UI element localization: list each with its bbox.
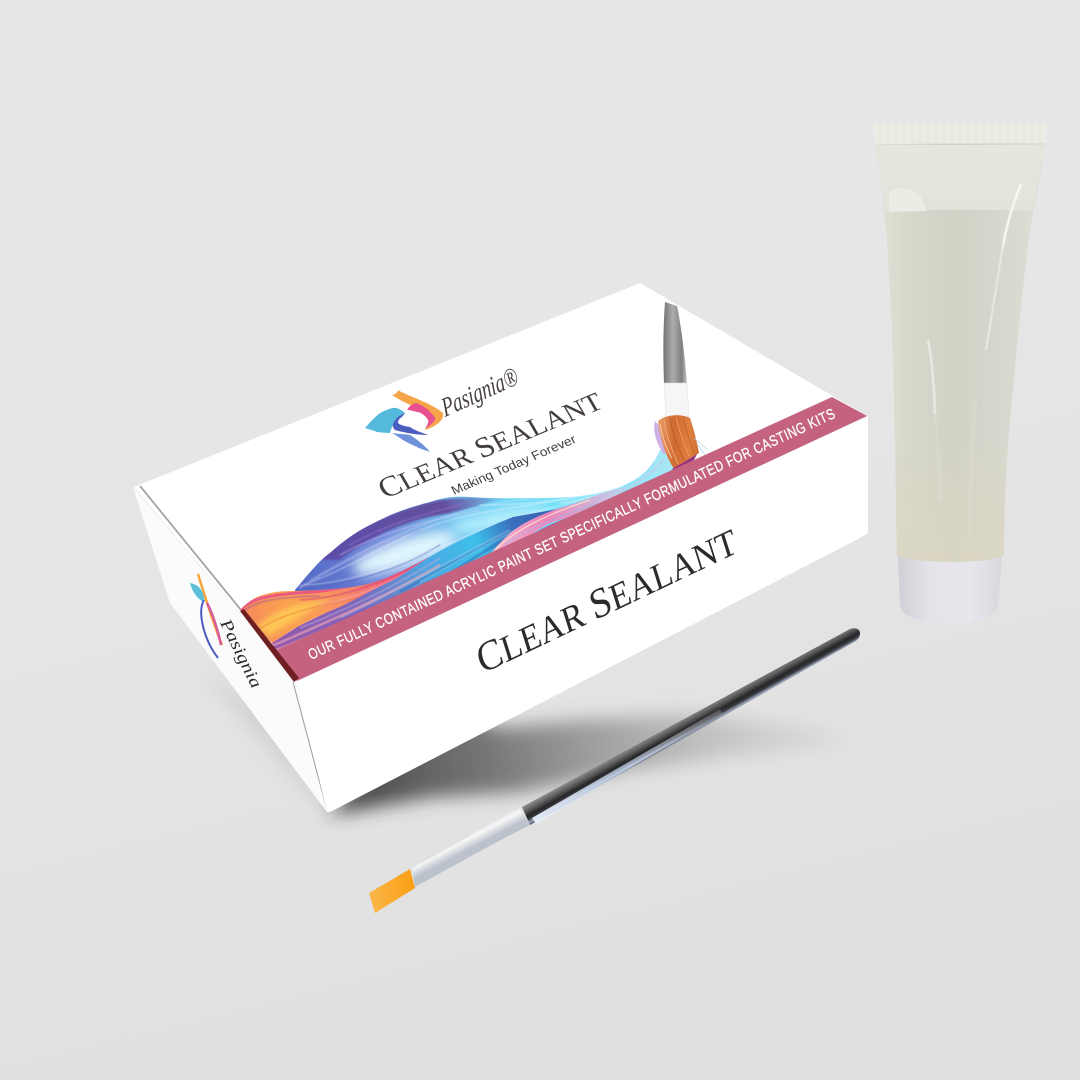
magenta below bristles [672,454,697,470]
tube upper empty area [877,145,1045,212]
brand name: Pasignia® [437,361,521,423]
tube body [876,143,1045,562]
box front title: CLEAR SEALANT [471,518,742,684]
product scene [133,124,1045,913]
painting brush [654,302,708,468]
box hinge line [140,486,241,610]
crimp [873,123,1047,144]
box left side face [133,487,330,812]
handle [522,628,860,825]
tagline: Making Today Forever [449,432,579,498]
brush bristles [654,415,708,468]
orange and pink wave [240,556,430,643]
small flat brush [369,628,860,913]
side logo [190,574,266,692]
side logo: Pasignia [216,614,266,692]
lower deep blue flow [272,509,557,650]
main blue flow [295,450,674,591]
tube highlights [928,184,1021,540]
brush handle [663,302,687,383]
sealant tube [873,123,1047,624]
logo mark [365,390,443,452]
box shadow [200,670,860,815]
box top face [134,283,867,681]
box front face [296,416,868,812]
magenta under-stream [536,515,573,532]
air bubble highlight [889,188,927,212]
tube warm lower tint [894,440,1008,562]
handle gloss [532,709,722,824]
box flap fold edge [240,609,299,682]
pink stream [490,487,627,555]
bristles [369,869,415,913]
ferrule [412,808,530,887]
pink banner [275,397,867,681]
box top title: CLEAR SEALANT [372,385,608,505]
paint swoosh artwork [240,450,697,650]
brush ferrule [664,383,689,417]
cap [898,556,1002,624]
box [133,283,868,812]
pink banner: OUR FULLY CONTAINED ACRYLIC PAINT SET SPECIFICALLY FORMULATED FOR CASTING KITS [306,405,838,664]
